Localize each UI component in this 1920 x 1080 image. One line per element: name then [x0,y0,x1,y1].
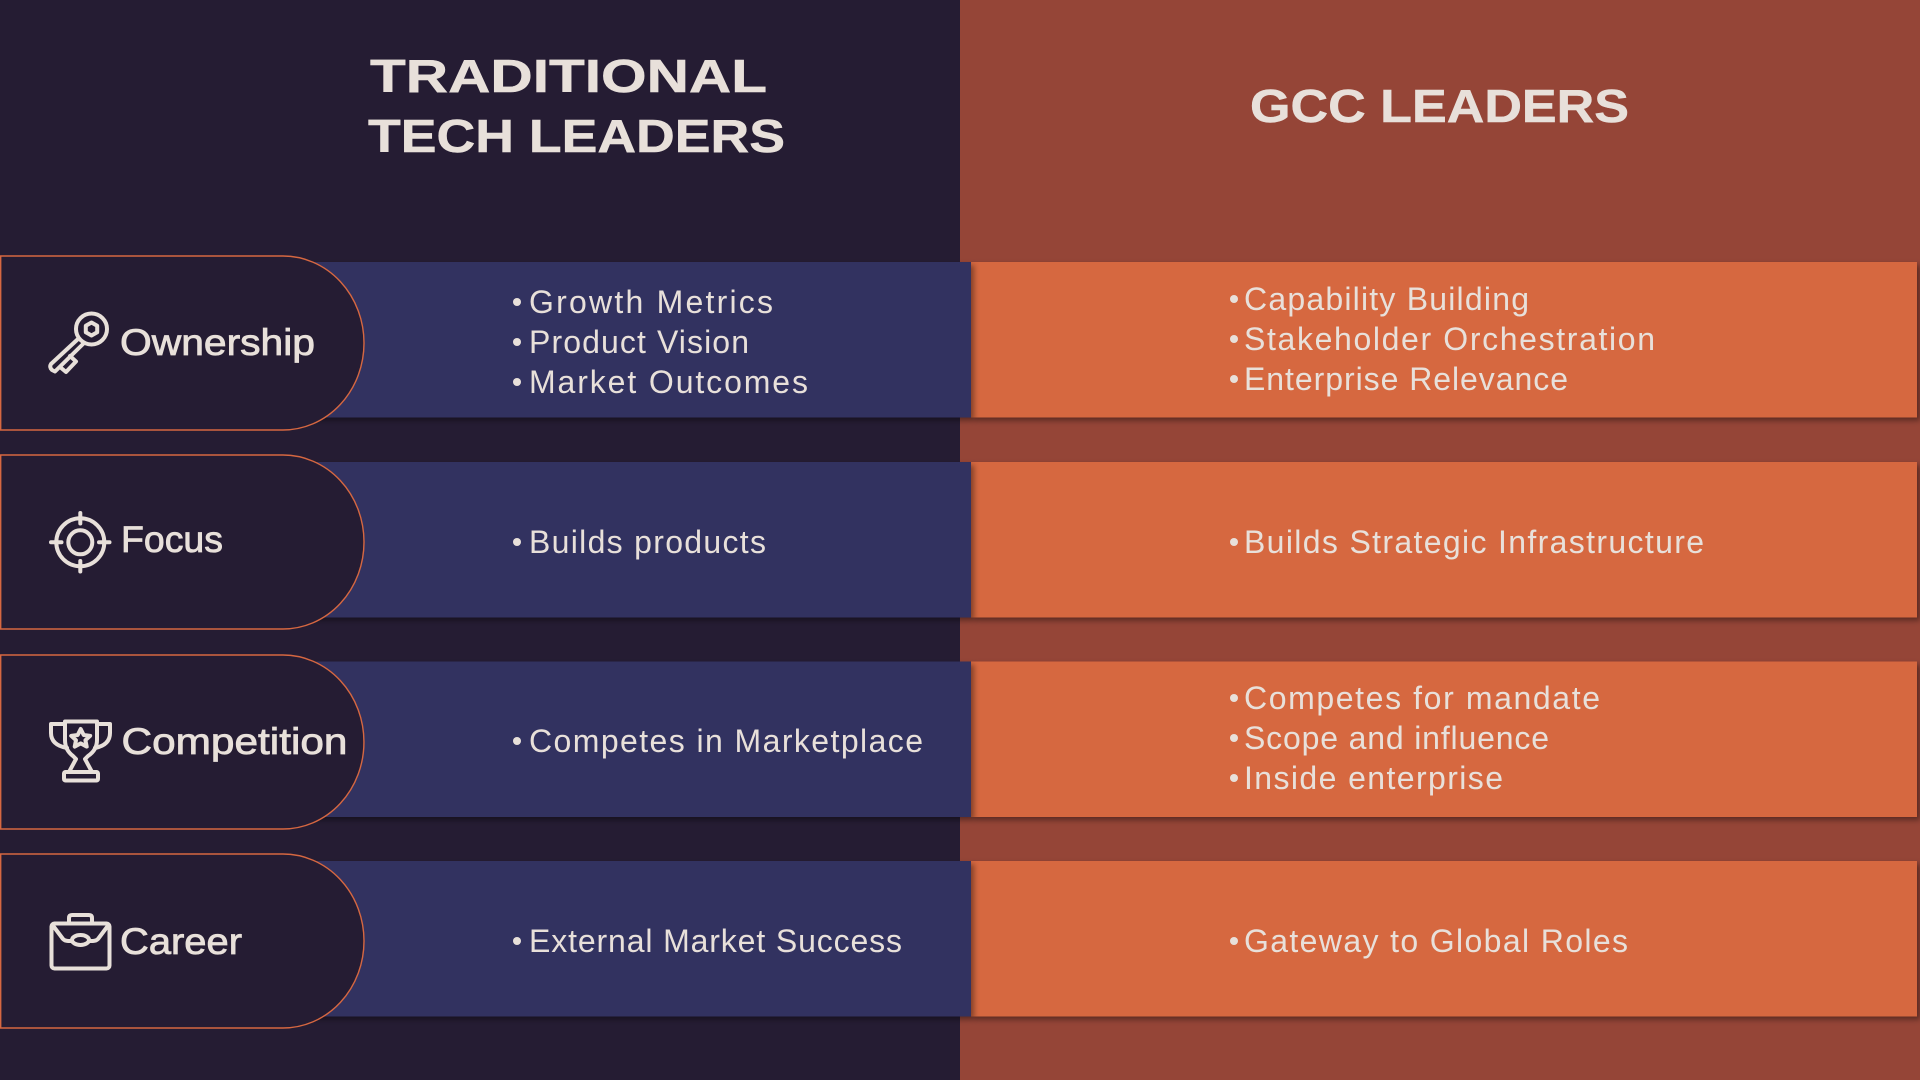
icon: target [51,513,110,572]
bar: traditional competition [280,662,971,817]
bar: gcc competition: Competes for mandate [1244,680,1600,716]
heading: traditional tech leaders: TECH LEADERS [368,110,785,162]
heading: traditional tech leaders [368,50,785,162]
icon: briefcase [52,915,110,968]
bar: gcc competition [971,662,1917,817]
heading: traditional tech leaders: TRADITIONAL [370,50,767,102]
label text: ownership: Ownership [120,322,315,363]
label text: focus: Focus [121,519,223,560]
bar: traditional career [280,861,971,1016]
panel: row 2 focus [1,455,1917,629]
bar: gcc competition: Scope and influence [1244,720,1549,756]
heading: gcc leaders: GCC LEADERS [1250,80,1629,132]
bar: gcc focus: Builds Strategic Infrastructure [1244,524,1704,560]
bar: gcc ownership: Enterprise Relevance [1244,361,1568,397]
panel: row 4 career [1,854,1917,1028]
label pill: focus [1,455,364,629]
bar: traditional competition: Competes in Marketplace [529,723,923,759]
bar: gcc career [971,861,1917,1016]
bar: gcc ownership: Capability Building [1244,281,1529,317]
bar: traditional ownership [280,262,971,418]
label text: career: Career [120,921,242,962]
panel: right background [960,0,1920,1080]
bar: gcc ownership: Stakeholder Orchestration [1244,321,1655,357]
bar: gcc ownership [971,262,1917,418]
label pill: ownership [1,256,364,430]
bar: traditional ownership: Product Vision [529,324,749,360]
label pill: career [1,854,364,1028]
panel: left background [0,0,960,1080]
bar: traditional ownership: Market Outcomes [529,364,808,400]
bar: traditional focus [280,462,971,618]
bar: gcc competition: Inside enterprise [1244,760,1503,796]
bar: traditional career: External Market Success [529,923,902,959]
panel: row 3 competition [1,655,1917,829]
bar: gcc focus [971,462,1917,618]
label pill: competition [1,655,364,829]
icon: key [50,314,107,372]
panel: row 1 ownership [1,256,1917,430]
icon: trophy [51,722,110,780]
bar: gcc career: Gateway to Global Roles [1244,923,1628,959]
bar: traditional focus: Builds products [529,524,766,560]
bar: traditional ownership: Growth Metrics [529,284,773,320]
label text: competition: Competition [122,721,348,762]
